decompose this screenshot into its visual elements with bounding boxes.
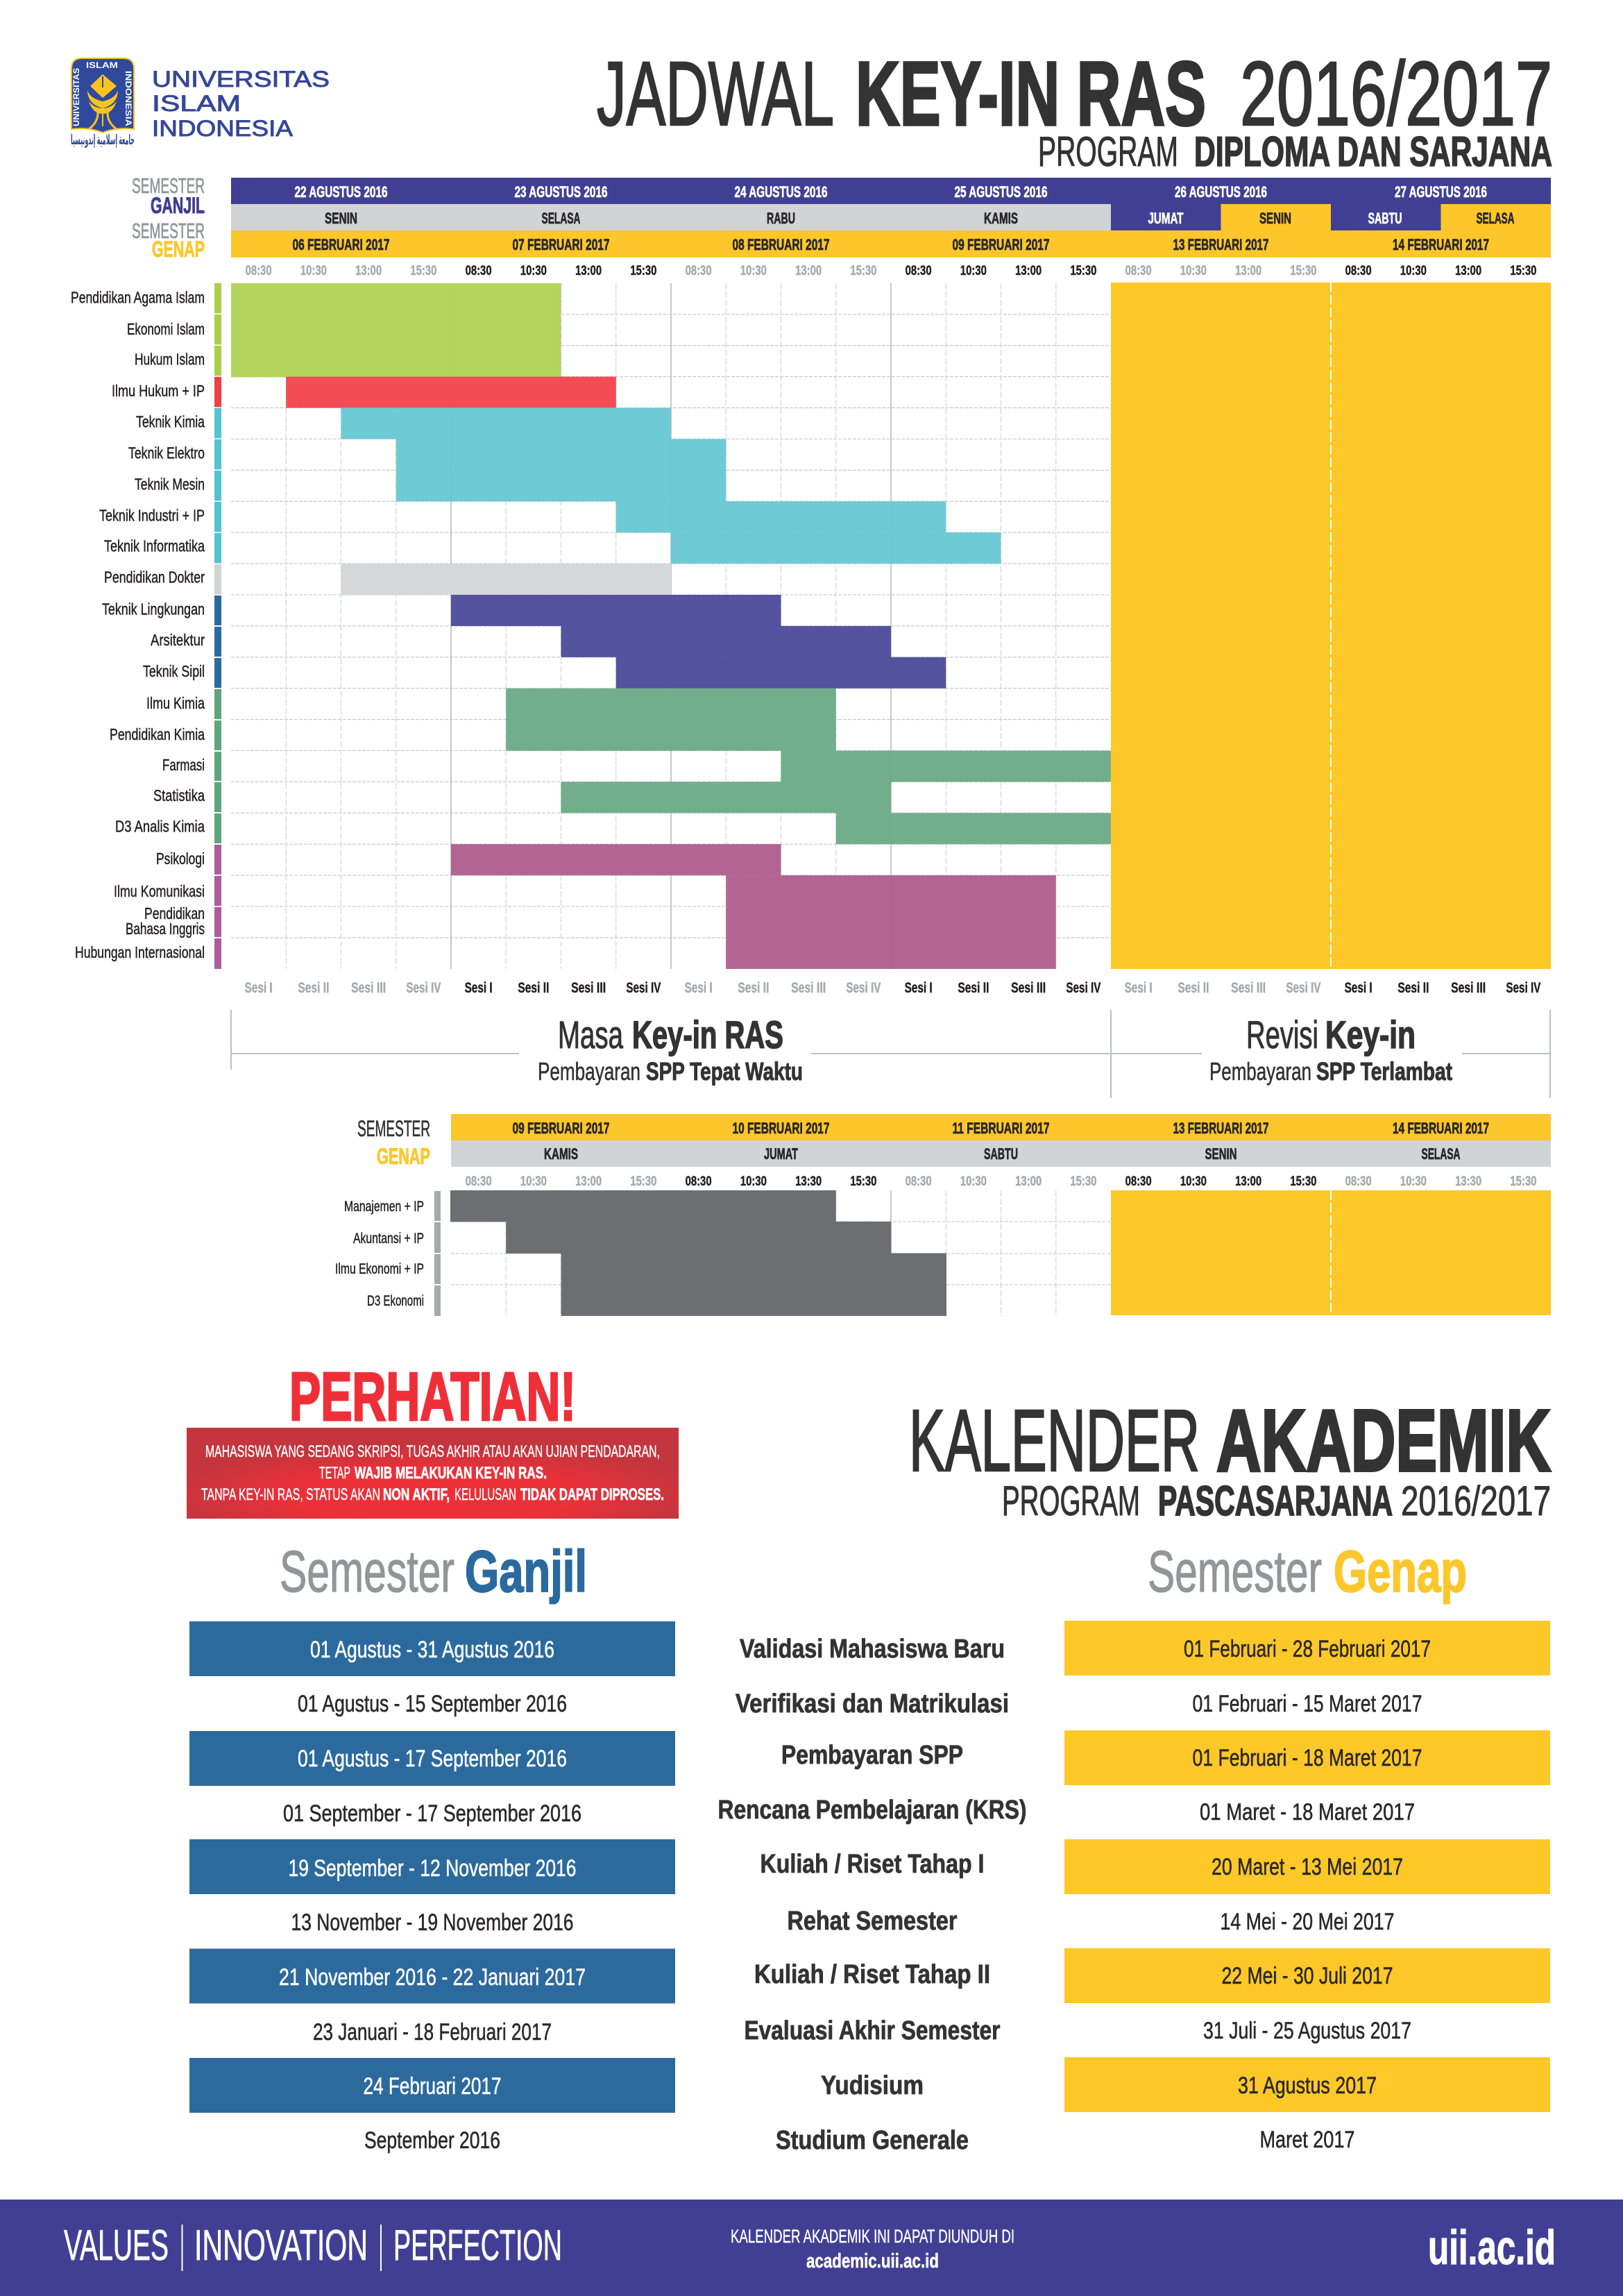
- label: Psikologi: Psikologi: [156, 850, 205, 868]
- session labels: Sesi I: [465, 980, 493, 996]
- header band: tanggal semester ganjil: 26 AGUSTUS 2016: [1175, 183, 1267, 201]
- header band: hari: RABU: [767, 210, 795, 227]
- bar: Ilmu Kimia, Pendidikan Kimia: [506, 689, 836, 751]
- header band: tanggal second schedule: [451, 1114, 1551, 1140]
- row: Kuliah / Riset Tahap II, ganjil: 21 November 2016 - 22 Januari 2017: [279, 1964, 586, 1991]
- time labels: main schedule: 08:30: [686, 264, 712, 278]
- session labels: Sesi II: [1178, 980, 1209, 996]
- time labels: main schedule: 08:30: [466, 264, 492, 278]
- header band: hari: JUMAT: [1148, 210, 1184, 227]
- panel: academic activities: Evaluasi Akhir Semester: [744, 2016, 1001, 2045]
- callout: peringatan key-in: [187, 1428, 679, 1519]
- callout: peringatan key-in: MAHASISWA YANG SEDANG SKRIPSI, TUGAS AKHIR ATAU AKAN UJIAN PENDADARAN,: [205, 1442, 660, 1461]
- bar: Teknik Sipil: [616, 657, 946, 689]
- gantt bars: second schedule: [450, 1190, 946, 1316]
- label: Pendidikan Bahasa Inggris: Pendidikan: [144, 904, 205, 922]
- label: Teknik Sipil: Teknik Sipil: [143, 662, 205, 680]
- time labels: main schedule: 10:30: [520, 264, 547, 278]
- header band: tanggal semester ganjil: 22 AGUSTUS 2016: [294, 183, 387, 201]
- heading: Semester Genap: Genap: [1334, 1539, 1467, 1604]
- heading: Revisi Key-in: Key-in: [1325, 1013, 1416, 1056]
- subtitle: Program Pascasarjana: 2016/2017: [1401, 1478, 1551, 1524]
- bar: D3 Ekonomi: [561, 1285, 946, 1316]
- bar: Akuntansi + IP: [506, 1222, 891, 1253]
- row: Kuliah / Riset Tahap II, ganjil: [189, 1949, 675, 2003]
- label: Teknik Mesin: Teknik Mesin: [135, 475, 205, 493]
- session labels: Sesi II: [298, 980, 329, 996]
- heading: Revisi Key-in: SPP Terlambat: [1316, 1057, 1452, 1086]
- row: Verifikasi dan Matrikulasi, ganjil: 01 Agustus - 15 September 2016: [298, 1691, 567, 1717]
- heading: Semester Ganjil: Ganjil: [465, 1539, 587, 1604]
- header band: tanggal semester ganjil: 27 AGUSTUS 2016: [1395, 183, 1487, 201]
- semester labels: [132, 174, 205, 262]
- panel: academic activities: Validasi Mahasiswa Baru: [740, 1635, 1005, 1664]
- row: Pembayaran SPP, ganjil: 01 Agustus - 17 September 2016: [298, 1746, 567, 1772]
- footer motto: [64, 2222, 562, 2271]
- row: Yudisium, genap: [1064, 2057, 1550, 2112]
- time labels: main schedule: 10:30: [1180, 264, 1207, 278]
- time labels: main schedule: 13:00: [1015, 264, 1042, 278]
- session labels: Sesi II: [958, 980, 989, 996]
- panel: academic activities: Kuliah / Riset Tahap I: [760, 1850, 984, 1879]
- heading: Perhatian: PERHATIAN!: [289, 1358, 576, 1435]
- callout: peringatan key-in: TANPA KEY-IN RAS, STATUS AKAN: [201, 1485, 380, 1504]
- programme labels: [71, 289, 205, 961]
- bar: Ilmu Ekonomi + IP: [561, 1253, 946, 1285]
- bar: Statistika: [561, 782, 891, 813]
- panel: academic activities: Rencana Pembelajaran (KRS): [717, 1796, 1027, 1825]
- session labels: Sesi IV: [1286, 980, 1320, 996]
- footer download note: [731, 2226, 1014, 2272]
- header band: hari: SABTU: [1368, 210, 1402, 227]
- time labels: second schedule: 08:30: [466, 1174, 492, 1189]
- session labels: Sesi I: [905, 980, 933, 996]
- row: Kuliah / Riset Tahap II, genap: 22 Mei - 30 Juli 2017: [1221, 1963, 1393, 1989]
- time labels: main schedule: 15:30: [630, 264, 656, 278]
- row: Evaluasi Akhir Semester, genap: 31 Juli - 25 Agustus 2017: [1203, 2018, 1411, 2044]
- header band: tanggal second schedule: 14 FEBRUARI 2017: [1393, 1120, 1489, 1137]
- time labels: second schedule: 08:30: [906, 1174, 932, 1189]
- panel: academic activities: Pembayaran SPP: [781, 1741, 963, 1770]
- footer motto: PERFECTION: [393, 2222, 562, 2270]
- time labels: main schedule: 13:00: [1235, 264, 1261, 278]
- header band: hari: SENIN: [1259, 210, 1291, 227]
- row: Rehat Semester, genap: 14 Mei - 20 Mei 2017: [1220, 1909, 1395, 1935]
- semester labels: SEMESTER: [132, 174, 205, 198]
- label: Teknik Elektro: Teknik Elektro: [128, 444, 205, 462]
- header band: hari second schedule: JUMAT: [764, 1145, 798, 1163]
- header band: tanggal second schedule: 11 FEBRUARI 2017: [952, 1120, 1049, 1137]
- row: Verifikasi dan Matrikulasi, genap: 01 Februari - 15 Maret 2017: [1192, 1691, 1422, 1717]
- time labels: main schedule: 10:30: [960, 264, 987, 278]
- programme labels: second schedule: Manajemen + IP: [344, 1199, 424, 1215]
- label: Arsitektur: Arsitektur: [151, 631, 205, 649]
- panel: semester ganjil dates: [189, 1621, 675, 2154]
- title: Kalender Akademik: KALENDER: [909, 1392, 1200, 1489]
- programme labels: second schedule: [335, 1199, 424, 1309]
- panel: academic activities: Studium Generale: [776, 2126, 969, 2155]
- bar: Manajemen + IP: [450, 1190, 836, 1222]
- time labels: main schedule: 08:30: [246, 264, 272, 278]
- label: Ilmu Kimia: Ilmu Kimia: [146, 694, 205, 712]
- header band: hari second schedule: SABTU: [984, 1145, 1018, 1163]
- session labels: Sesi IV: [626, 980, 661, 996]
- programme labels: second schedule: Akuntansi + IP: [353, 1231, 424, 1247]
- semester labels: SEMESTER: [132, 219, 205, 243]
- header band: tanggal second schedule: 09 FEBRUARI 2017: [512, 1120, 609, 1137]
- panel: academic activities: [717, 1635, 1027, 2155]
- session labels: Sesi II: [518, 980, 549, 996]
- bar: D3 Analis Kimia: [836, 813, 1111, 844]
- heading: Revisi Key-in: [1209, 1013, 1452, 1086]
- time labels: second schedule: 13:30: [1455, 1174, 1481, 1189]
- header band: tanggal semester genap: 13 FEBRUARI 2017: [1173, 236, 1268, 253]
- header band: hari: SENIN: [325, 210, 357, 227]
- time labels: second schedule: 13:00: [1235, 1174, 1261, 1189]
- footer motto: INNOVATION: [194, 2222, 368, 2270]
- session labels: Sesi I: [685, 980, 713, 996]
- callout: peringatan key-in: NON AKTIF,: [383, 1485, 450, 1504]
- time labels: main schedule: 10:30: [1400, 264, 1427, 278]
- programme strips: second schedule: [434, 1191, 441, 1316]
- label: Farmasi: Farmasi: [162, 756, 205, 774]
- session labels: Sesi III: [571, 980, 606, 996]
- row: Validasi Mahasiswa Baru, genap: [1064, 1621, 1550, 1675]
- session labels: Sesi II: [1397, 980, 1429, 996]
- time labels: main schedule: 15:30: [1290, 264, 1316, 278]
- title: Jadwal Key-in RAS: [597, 42, 1552, 144]
- time labels: second schedule: 10:30: [740, 1174, 767, 1189]
- header band: tanggal semester genap: [231, 230, 1551, 258]
- panel: academic activities: Verifikasi dan Matrikulasi: [736, 1689, 1009, 1719]
- header band: hari second schedule: SENIN: [1205, 1145, 1237, 1163]
- bar: Teknik Lingkungan: [451, 595, 781, 626]
- heading: Masa Key-in RAS: Masa: [558, 1013, 624, 1056]
- subtitle: Program Pascasarjana: [1002, 1478, 1551, 1524]
- grid lines: second schedule: [451, 1190, 1110, 1316]
- header band: tanggal semester ganjil: 23 AGUSTUS 2016: [515, 183, 608, 201]
- programme labels: second schedule: D3 Ekonomi: [367, 1293, 424, 1309]
- callout: peringatan key-in: TETAP: [319, 1464, 350, 1483]
- schedule grid lines: [231, 283, 1110, 969]
- session labels: Sesi IV: [846, 980, 881, 996]
- panel: academic activities: Rehat Semester: [787, 1907, 958, 1936]
- session labels: Sesi III: [1451, 980, 1486, 996]
- header band: hari second schedule: [451, 1140, 1551, 1167]
- row: Validasi Mahasiswa Baru, ganjil: 01 Agustus - 31 Agustus 2016: [310, 1637, 554, 1663]
- time labels: main schedule: 13:00: [795, 264, 822, 278]
- time labels: main schedule: 13:00: [575, 264, 602, 278]
- logo: Universitas Islam Indonesia: جامعة إسلامية إندونيسيا: [71, 133, 135, 148]
- row: Studium Generale, ganjil: September 2016: [364, 2127, 500, 2154]
- panel: academic activities: Yudisium: [821, 2071, 924, 2100]
- label: Ekonomi Islam: Ekonomi Islam: [127, 320, 205, 338]
- time labels: main schedule: 08:30: [1345, 264, 1372, 278]
- heading: Masa Key-in RAS: [538, 1013, 803, 1086]
- header band: hari second schedule: SELASA: [1421, 1145, 1461, 1163]
- time labels: main schedule: 10:30: [740, 264, 767, 278]
- semester labels: GANJIL: [151, 193, 205, 218]
- programme labels: second schedule: Ilmu Ekonomi + IP: [335, 1261, 424, 1277]
- header band: tanggal semester genap: 14 FEBRUARI 2017: [1393, 236, 1489, 253]
- bar: Teknik Industri + IP: [616, 501, 946, 532]
- semester genap label: second schedule: [357, 1116, 430, 1169]
- semester genap label: second schedule: SEMESTER: [357, 1116, 430, 1141]
- label: Teknik Informatika: Teknik Informatika: [104, 537, 205, 555]
- time labels: main schedule: 08:30: [906, 264, 932, 278]
- row: Rencana Pembelajaran, genap: 01 Maret - 18 Maret 2017: [1200, 1799, 1415, 1825]
- header band: tanggal semester ganjil: 24 AGUSTUS 2016: [734, 183, 827, 201]
- time labels: second schedule: [466, 1174, 1536, 1189]
- bar: Teknik Elektro, Teknik Mesin: [396, 439, 726, 501]
- row: Yudisium, genap: 31 Agustus 2017: [1238, 2073, 1377, 2099]
- session labels: Sesi IV: [1066, 980, 1101, 996]
- bar: Ilmu Komunikasi, Pendidikan Bahasa Inggris, Hubungan Internasional: [726, 875, 1056, 969]
- gantt bars: main schedule: [231, 283, 1111, 969]
- label: Ilmu Hukum + IP: Ilmu Hukum + IP: [112, 382, 205, 400]
- logo wordmark: UNIVERSITAS: [152, 67, 330, 92]
- subtitle: Program Diploma dan Sarjana: PROGRAM: [1038, 128, 1178, 175]
- heading: Masa Key-in RAS: SPP Tepat Waktu: [646, 1057, 803, 1086]
- bracket: period ranges: [231, 1010, 1550, 1098]
- callout: peringatan key-in: KELULUSAN: [454, 1485, 516, 1504]
- footer band: [0, 2200, 1623, 2296]
- bar: Psikologi: [451, 844, 781, 875]
- session labels: Sesi III: [791, 980, 826, 996]
- revisi period block: second schedule: [1111, 1190, 1551, 1315]
- time labels: second schedule: 15:30: [1070, 1174, 1096, 1189]
- time labels: main schedule: 13:00: [355, 264, 382, 278]
- time labels: main schedule: 15:30: [850, 264, 876, 278]
- row: Yudisium, ganjil: 24 Februari 2017: [364, 2073, 501, 2100]
- session labels: [245, 980, 1540, 996]
- semester genap label: second schedule: GENAP: [377, 1144, 430, 1169]
- session labels: Sesi III: [1231, 980, 1266, 996]
- row: Kuliah / Riset Tahap I, ganjil: [189, 1839, 675, 1894]
- heading: Masa Key-in RAS: Key-in RAS: [632, 1013, 783, 1056]
- row: Rehat Semester, ganjil: 13 November - 19 November 2016: [291, 1909, 573, 1936]
- row: Pembayaran SPP, genap: [1064, 1730, 1550, 1785]
- time labels: second schedule: 08:30: [1125, 1174, 1152, 1189]
- label: Ilmu Komunikasi: Ilmu Komunikasi: [114, 882, 205, 900]
- icon: university crest: [71, 58, 135, 148]
- row: Pembayaran SPP, genap: 01 Februari - 18 Maret 2017: [1192, 1745, 1422, 1771]
- heading: Masa Key-in RAS: Pembayaran: [538, 1057, 640, 1086]
- header band: tanggal second schedule: 10 FEBRUARI 2017: [733, 1120, 830, 1137]
- label: Pendidikan Kimia: Pendidikan Kimia: [110, 725, 205, 743]
- header band: tanggal semester genap: 08 FEBRUARI 2017: [733, 236, 830, 253]
- subtitle: Program Diploma dan Sarjana: [1038, 128, 1552, 175]
- time labels: second schedule: 10:30: [1180, 1174, 1207, 1189]
- time labels: second schedule: 13:30: [795, 1174, 822, 1189]
- footer download note: KALENDER AKADEMIK INI DAPAT DIUNDUH DI: [731, 2226, 1014, 2247]
- row: Validasi Mahasiswa Baru, genap: 01 Februari - 28 Februari 2017: [1184, 1636, 1431, 1662]
- row: Evaluasi Akhir Semester, ganjil: 23 Januari - 18 Februari 2017: [313, 2019, 552, 2045]
- header band: tanggal semester genap: 07 FEBRUARI 2017: [512, 236, 609, 253]
- subtitle: Program Pascasarjana: PASCASARJANA: [1158, 1478, 1393, 1524]
- session labels: Sesi I: [1345, 980, 1373, 996]
- bar: Pendidikan Agama Islam, Ekonomi Islam, Hukum Islam: [231, 283, 561, 378]
- row: Kuliah / Riset Tahap I, genap: 20 Maret - 13 Mei 2017: [1212, 1854, 1403, 1880]
- label: Teknik Industri + IP: Teknik Industri + IP: [99, 507, 205, 525]
- time labels: second schedule: 15:30: [1510, 1174, 1536, 1189]
- bar: Ilmu Hukum + IP: [286, 377, 616, 408]
- semester labels: GENAP: [152, 237, 205, 262]
- time labels: second schedule: 15:30: [850, 1174, 876, 1189]
- heading: Semester Genap: Semester: [1148, 1539, 1322, 1604]
- label: Pendidikan Dokter: Pendidikan Dokter: [104, 568, 205, 586]
- icon: university crest: ISLAM: [86, 60, 118, 70]
- time labels: main schedule: 13:00: [1455, 264, 1481, 278]
- header band: tanggal semester genap: 09 FEBRUARI 2017: [952, 236, 1049, 253]
- revisi period block: [1111, 282, 1551, 969]
- heading: Revisi Key-in: Revisi: [1246, 1013, 1318, 1056]
- label: Teknik Kimia: Teknik Kimia: [136, 412, 205, 430]
- session labels: Sesi I: [1125, 980, 1153, 996]
- time labels: second schedule: 13:00: [1015, 1174, 1042, 1189]
- header band: hari: SELASA: [541, 210, 581, 227]
- label: D3 Analis Kimia: D3 Analis Kimia: [115, 818, 205, 836]
- session labels: Sesi IV: [406, 980, 441, 996]
- row: Kuliah / Riset Tahap I, ganjil: 19 September - 12 November 2016: [289, 1855, 576, 1882]
- time labels: second schedule: 10:30: [1400, 1174, 1427, 1189]
- panel: semester genap dates: [1064, 1621, 1550, 2153]
- header band: tanggal semester ganjil: 25 AGUSTUS 2016: [955, 183, 1048, 201]
- label: Pendidikan Bahasa Inggris: [126, 904, 205, 938]
- time labels: main schedule: 10:30: [300, 264, 327, 278]
- footer website: uii.ac.id: [1428, 2220, 1556, 2274]
- session labels: Sesi I: [245, 980, 273, 996]
- row: Studium Generale, genap: Maret 2017: [1260, 2127, 1354, 2153]
- time labels: main schedule: 15:30: [1510, 264, 1536, 278]
- logo wordmark: INDONESIA: [152, 116, 294, 141]
- row: Validasi Mahasiswa Baru, ganjil: [189, 1621, 675, 1676]
- subtitle: Program Pascasarjana: PROGRAM: [1002, 1478, 1140, 1524]
- bar: Teknik Informatika: [671, 532, 1001, 564]
- session labels: Sesi III: [1011, 980, 1046, 996]
- logo: Universitas Islam Indonesia: [71, 58, 330, 148]
- label: Pendidikan Bahasa Inggris: Bahasa Inggris: [126, 920, 205, 938]
- bar: Farmasi: [781, 751, 1111, 782]
- programme colour strips: [214, 283, 221, 969]
- icon: university crest: INDONESIA: [124, 71, 133, 126]
- time labels: second schedule: 08:30: [1345, 1174, 1372, 1189]
- row: Yudisium, ganjil: [189, 2058, 675, 2113]
- time labels: main schedule: 15:30: [1070, 264, 1096, 278]
- bar: Teknik Kimia: [341, 408, 671, 439]
- title: Jadwal Key-in RAS: JADWAL: [597, 42, 834, 144]
- logo wordmark: [152, 67, 330, 141]
- header band: hari: [231, 204, 1551, 230]
- heading: Revisi Key-in: Pembayaran: [1209, 1057, 1311, 1086]
- row: Kuliah / Riset Tahap II, genap: [1064, 1948, 1550, 2003]
- row: Kuliah / Riset Tahap I, genap: [1064, 1839, 1550, 1894]
- session labels: Sesi II: [738, 980, 769, 996]
- session labels: Sesi IV: [1506, 980, 1540, 996]
- bar: Arsitektur: [561, 626, 891, 657]
- time labels: second schedule: 15:30: [1290, 1174, 1316, 1189]
- header band: hari second schedule: KAMIS: [544, 1145, 578, 1163]
- time labels: second schedule: 13:00: [575, 1174, 602, 1189]
- label: Statistika: Statistika: [153, 786, 205, 804]
- logo wordmark: ISLAM: [152, 91, 241, 116]
- title: Jadwal Key-in RAS: KEY-IN RAS: [856, 42, 1206, 144]
- heading: Semester Ganjil: Semester: [280, 1539, 454, 1604]
- time labels: second schedule: 10:30: [520, 1174, 547, 1189]
- time labels: main schedule: [246, 264, 1536, 278]
- bar: Pendidikan Dokter: [341, 564, 671, 595]
- time labels: second schedule: 15:30: [630, 1174, 656, 1189]
- time labels: main schedule: 15:30: [410, 264, 436, 278]
- time labels: second schedule: 10:30: [960, 1174, 987, 1189]
- label: Hukum Islam: Hukum Islam: [135, 350, 205, 368]
- header band: hari: SELASA: [1477, 210, 1515, 227]
- header band: tanggal second schedule: 13 FEBRUARI 2017: [1173, 1120, 1268, 1137]
- icon: university crest: UNIVERSITAS: [71, 68, 81, 126]
- session labels: Sesi III: [351, 980, 386, 996]
- label: Teknik Lingkungan: Teknik Lingkungan: [102, 600, 205, 618]
- footer download note: academic.uii.ac.id: [806, 2250, 939, 2272]
- row: Pembayaran SPP, ganjil: [189, 1731, 675, 1786]
- panel: academic activities: Kuliah / Riset Tahap II: [754, 1960, 990, 1989]
- label: Hubungan Internasional: Hubungan Internasional: [75, 943, 205, 961]
- header band: tanggal semester ganjil: [231, 178, 1551, 204]
- header band: hari: KAMIS: [984, 210, 1018, 227]
- callout: peringatan key-in: TIDAK DAPAT DIPROSES.: [520, 1485, 664, 1504]
- time labels: main schedule: 08:30: [1125, 264, 1152, 278]
- header band: tanggal semester genap: 06 FEBRUARI 2017: [293, 236, 390, 253]
- label: Pendidikan Agama Islam: Pendidikan Agama Islam: [71, 289, 205, 307]
- footer motto: VALUES: [64, 2222, 169, 2270]
- time labels: second schedule: 08:30: [686, 1174, 712, 1189]
- callout: peringatan key-in: WAJIB MELAKUKAN KEY-IN RAS.: [355, 1464, 547, 1483]
- row: Rencana Pembelajaran, ganjil: 01 September - 17 September 2016: [283, 1800, 581, 1827]
